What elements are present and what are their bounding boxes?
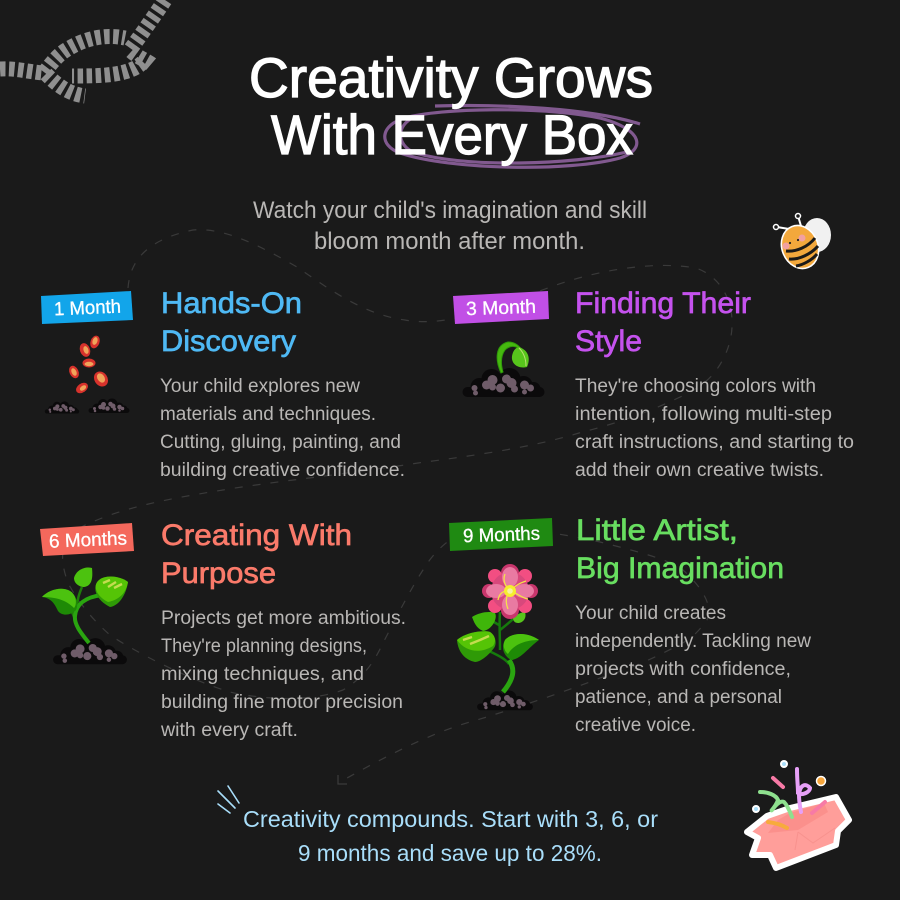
body text: craft instructions, and starting to [575, 432, 854, 453]
subtitle: bloom month after month. [314, 228, 585, 255]
heading: Finding Their Style: Style [575, 325, 642, 358]
body text [575, 376, 854, 481]
body text: with every craft. [160, 720, 298, 741]
body text: Your child explores new [160, 376, 360, 397]
body text: mixing techniques, and [161, 664, 364, 685]
tag: 9 Months: 9 Months [463, 524, 540, 547]
scribble highlight around Every Box [385, 106, 640, 167]
callout text: Creativity compounds. Start with 3, 6, or [243, 806, 658, 832]
body text: patience, and a personal [575, 687, 782, 708]
icon: spark lines [218, 786, 239, 813]
title: Creativity Grows [249, 46, 653, 109]
body text [575, 603, 811, 736]
body text: They're planning designs, [161, 636, 367, 657]
dashed journey path [63, 230, 732, 784]
body text: Projects get more ambitious. [161, 608, 406, 629]
body text: building creative confidence. [160, 460, 405, 481]
icon: sprout [462, 342, 544, 397]
heading: Little Artist, Big Imagination [576, 514, 784, 585]
callout text: 9 months and save up to 28%. [298, 840, 602, 866]
body text: building fine motor precision [161, 692, 403, 713]
title [249, 46, 653, 166]
icon: falling seeds [45, 334, 130, 414]
heading: Hands-On Discovery: Discovery [161, 325, 296, 358]
heading: Finding Their Style [575, 287, 751, 358]
heading: Hands-On Discovery: Hands-On [161, 287, 302, 320]
body text: projects with confidence, [575, 659, 791, 680]
heading: Little Artist, Big Imagination: Little Artist, [576, 514, 738, 547]
tag: 9 Months [449, 518, 553, 551]
subtitle [253, 197, 647, 255]
body text: independently. Tackling new [575, 631, 811, 652]
subtitle: Watch your child's imagination and skill [253, 197, 647, 224]
icon: striped ribbon knot [0, 0, 165, 96]
body text [160, 376, 405, 481]
body text: add their own creative twists. [575, 460, 824, 481]
heading: Creating With Purpose: Purpose [161, 557, 276, 590]
callout text [243, 806, 658, 866]
body text: Your child creates [575, 603, 726, 624]
body text: creative voice. [575, 715, 696, 736]
tag: 1 Month: 1 Month [54, 297, 121, 320]
heading: Little Artist, Big Imagination: Big Imagination [576, 552, 784, 585]
heading: Hands-On Discovery [161, 287, 302, 358]
panel: 1 month [41, 287, 405, 481]
tag: 6 Months [40, 523, 134, 556]
icon: flowering plant [457, 564, 539, 710]
heading: Creating With Purpose [161, 519, 352, 590]
icon: bee [774, 214, 831, 274]
tag: 3 Month: 3 Month [466, 297, 536, 320]
icon: young plant [42, 567, 128, 664]
tag: 1 Month [41, 291, 133, 324]
panel: 6 months [40, 519, 406, 741]
title: With Every Box [271, 103, 633, 166]
heading: Creating With Purpose: Creating With [161, 519, 352, 552]
icon: gift box with confetti [747, 761, 849, 868]
body text: intention, following multi-step [575, 404, 832, 425]
body text: They're choosing colors with [575, 376, 816, 397]
body text: Cutting, gluing, painting, and [160, 432, 401, 453]
panel: 3 month [453, 287, 854, 481]
body text: materials and techniques. [160, 404, 376, 425]
tag: 3 Month [453, 291, 549, 324]
heading: Finding Their Style: Finding Their [575, 287, 751, 320]
body text [160, 608, 406, 741]
tag: 6 Months: 6 Months [49, 528, 127, 553]
panel: 9 months [449, 514, 811, 736]
